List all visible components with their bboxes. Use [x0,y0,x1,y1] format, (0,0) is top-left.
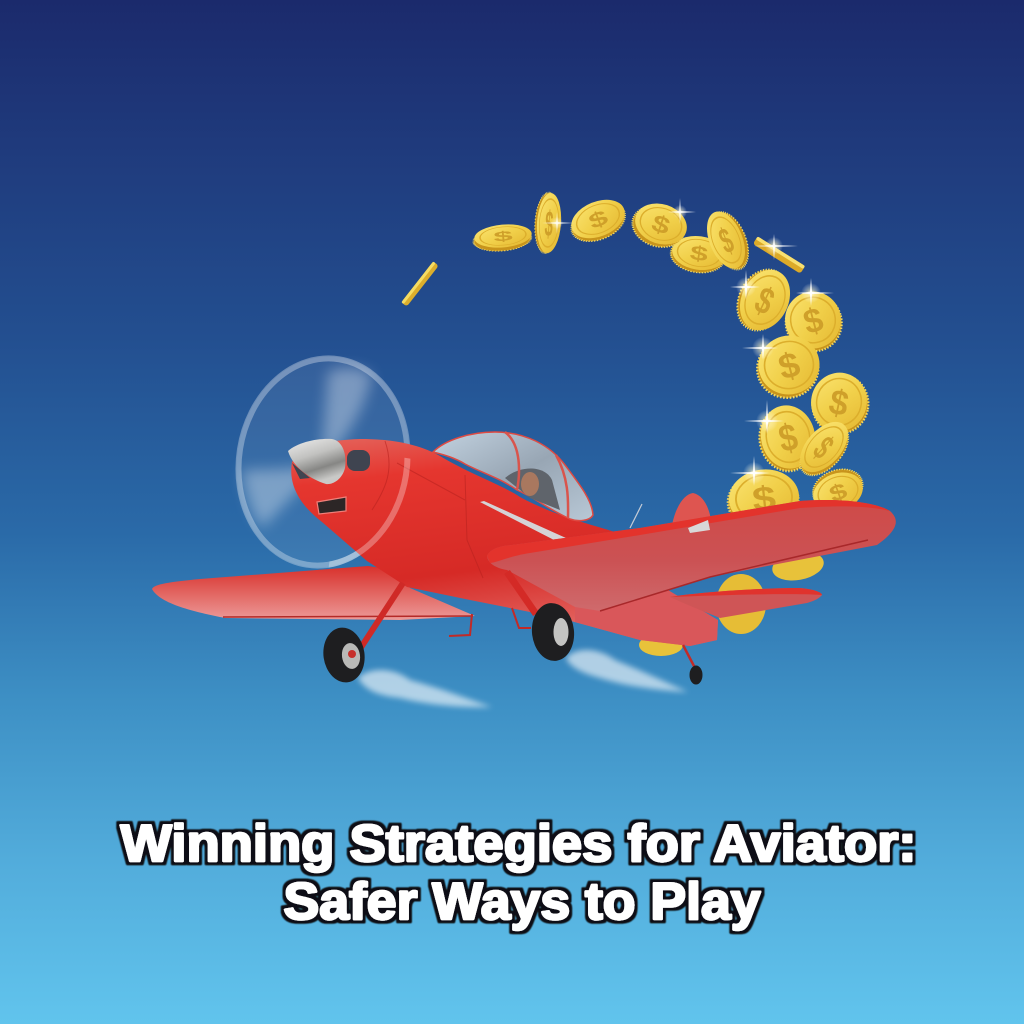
coin: $ [688,241,709,266]
coin [790,413,859,484]
coin: edge-on near top right [753,236,805,274]
right strut [507,572,536,614]
coin [805,367,874,439]
smoke trail right [566,650,688,692]
airplane [152,344,896,685]
pilot seat [505,468,560,510]
coin under wing [770,548,826,584]
air intake behind spinner [292,463,310,479]
coin behind tail [716,574,766,634]
left wing hinge line [223,616,473,617]
right wing hinge line [600,540,868,611]
coin: $ [826,382,852,424]
coin: $ [799,300,827,342]
coin behind wing: $ [826,478,851,507]
left hub [340,642,362,670]
coin [669,232,728,276]
canopy frames [505,432,568,518]
propeller disc [221,344,425,580]
sparkles on coins [542,198,834,486]
coin: $ [714,221,739,262]
wing inspection patch [688,520,710,533]
coin [565,192,631,249]
right hub [554,618,568,646]
small gear bracket [449,608,531,636]
coin [750,329,827,405]
right wing [487,500,896,611]
sparkle [730,270,760,300]
coin [472,222,533,253]
coin: $ [585,205,612,234]
coin: $ [648,209,674,240]
rear fuselage underside [575,590,718,646]
tail wheel [683,645,702,684]
right wing leading edge highlight [487,500,890,563]
coin: $ [748,279,781,324]
coin behind wing: $ [750,479,778,519]
coin [753,400,821,476]
coin: $ [805,429,841,467]
coin [728,261,800,339]
smoke trail left [358,670,492,707]
coin: $ [775,416,802,461]
vertical tail fin [672,493,711,530]
fuselage [291,439,718,646]
silver fuselage stripe [480,501,566,541]
coin: $ [774,343,804,388]
gold coin arc behind the plane [401,192,874,656]
left wheel [320,625,368,685]
left wing [152,566,475,620]
antenna [630,504,642,528]
title: Winning Strategies for Aviator: [120,815,916,873]
sparkle [754,234,798,260]
right wheel [529,601,577,663]
sparkle [668,198,696,224]
left landing gear [320,583,403,685]
title: Safer Ways to Play [284,873,761,931]
pilot head [521,472,539,496]
sparkle [730,456,770,486]
coin: $ [544,203,554,244]
sparkle [744,400,784,434]
horizontal tail plane [670,588,822,618]
coin: $ [493,228,514,245]
propeller spinner [288,439,345,484]
right landing gear [507,572,577,663]
coin [533,192,563,254]
left strut [358,583,403,652]
air intake upper [347,450,370,471]
sparkle [542,212,574,234]
coin [779,285,848,358]
tail leading edge [670,588,822,597]
coin behind wing [807,463,869,518]
coin [699,205,756,276]
sparkle [796,278,834,306]
canopy [433,432,593,521]
coin below fuselage [639,634,683,656]
cowling panel line [372,441,483,578]
coin: falling edge-on far left [401,261,439,307]
air intake lower [317,497,346,514]
coin behind wing [725,466,802,533]
coin [627,196,692,254]
propeller ring over nose [328,458,410,568]
sparkle [742,334,778,360]
